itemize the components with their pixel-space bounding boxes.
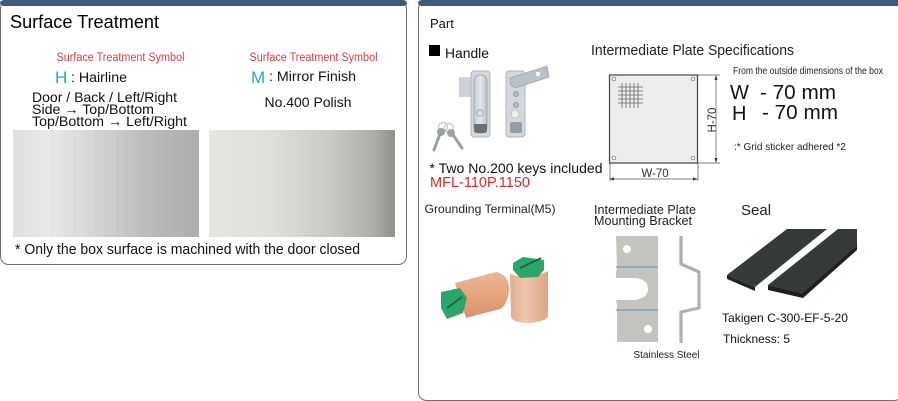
label: mirror symbol caption: Surface Treatment Symbol [250,52,378,64]
text: hairline directions [32,89,187,129]
column: hairline [32,52,187,129]
label: hairline symbol caption: Surface Treatment Symbol [56,52,184,64]
icon: grid sticker [618,83,643,108]
text: seal model: Takigen C-300-EF-5-20 [722,311,848,325]
image: mirror finish metal surface [209,130,395,237]
heading: seal: Seal [741,202,771,219]
section: grounding terminal [424,202,556,323]
text: model number: MFL-110P.1150 [430,175,530,191]
spec: W dimension [730,82,836,104]
image: hairline metal surface [13,130,199,237]
column: mirror finish [250,52,378,110]
label: grounding terminal: Grounding Terminal(M5) [424,202,556,216]
spec: H dimension: - 70 mm [762,102,838,124]
label: mirror finish: : Mirror Finish [269,68,356,84]
heading: part: Part [430,16,454,31]
label: stainless steel: Stainless Steel [634,349,700,361]
spec: H dimension: H [732,103,746,125]
text: hairline directions: Side → Top/Bottom [32,101,154,117]
image: bracket front [616,236,658,342]
heading: mounting bracket: Mounting Bracket [594,214,693,228]
text: keys included note: * Two No.200 keys included [430,160,602,176]
heading: surface treatment: Surface Treatment [10,12,159,32]
footnote: surface machining: * Only the box surface is machined with the door closed [15,242,360,258]
spec: W dimension: W [730,82,749,104]
image: handle front [459,71,490,137]
section: mounting bracket [594,203,700,361]
section: handle [429,45,602,191]
image: terminal lying [441,272,509,319]
text: hairline directions: Door / Back / Left/Right [32,89,177,105]
panel: part [418,0,898,400]
image: terminal upright [510,257,548,323]
panel: surface treatment [0,0,407,264]
heading: mounting bracket [594,203,696,228]
heading: mounting bracket: Intermediate Plate [594,203,696,217]
heading: intermediate plate specifications: Intermediate Plate Specifications [591,43,794,59]
text: no.400 polish: No.400 Polish [264,94,352,110]
section: seal [722,202,857,346]
spec: W dimension: - 70 mm [760,82,836,104]
spec: H dimension [732,102,838,125]
label: hairline: : Hairline [71,70,127,85]
text: hairline directions: Top/Bottom → Left/Right [32,113,187,129]
dimension: height: H-70 [707,108,719,132]
image: seal strips [727,229,857,298]
note: grid sticker: :* Grid sticker adhered *2 [734,141,846,153]
icon: black square bullet [429,45,440,56]
image: keys [434,122,462,150]
label: handle: Handle [445,45,489,61]
image: bracket side profile [681,236,699,343]
dimension: width: W-70 [641,168,669,180]
section: intermediate plate specifications [591,43,883,181]
symbol: H hairline: H [55,68,67,87]
text: seal thickness: Thickness: 5 [723,332,790,346]
diagram: intermediate plate [609,75,720,181]
symbol: M mirror finish: M [251,68,265,87]
image: handle open [506,66,549,137]
